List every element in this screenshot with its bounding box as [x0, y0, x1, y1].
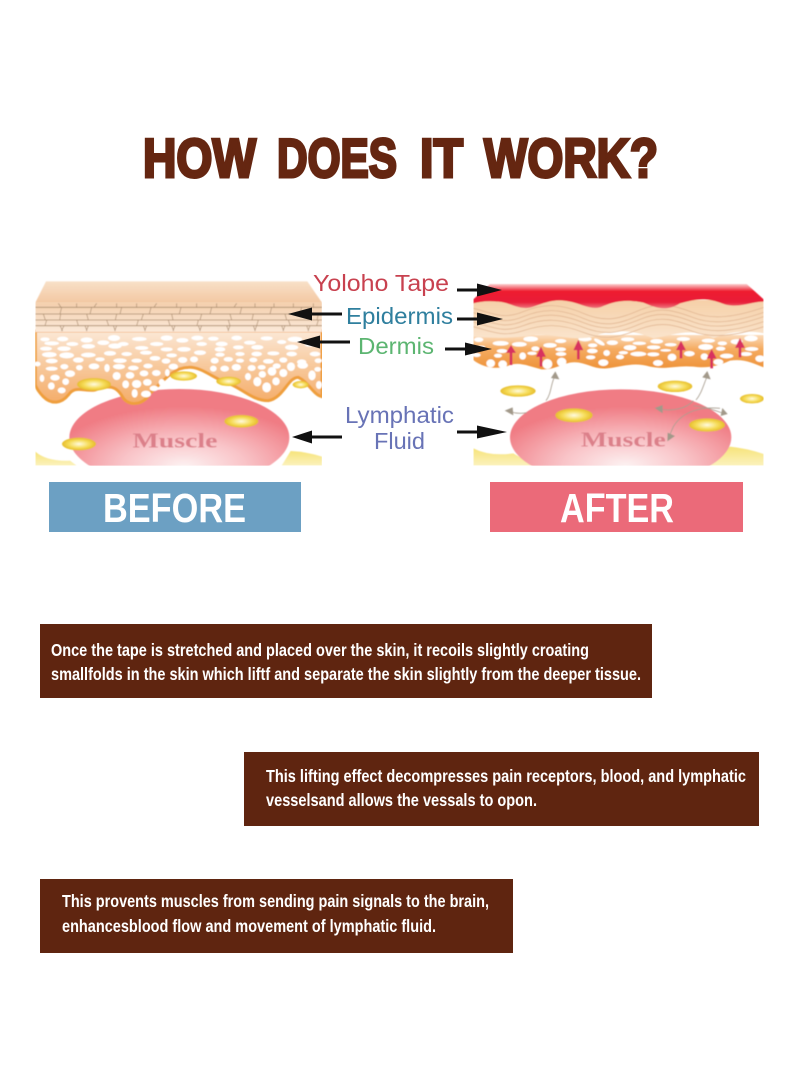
- text box 1: smallfolds in the skin which liftf and separate the skin slightly from the deeper tissue.: [51, 664, 641, 684]
- epidermis before: [35, 303, 322, 332]
- label: Epidermis: Epidermis: [346, 303, 453, 329]
- muscle before: Muscle: [132, 431, 217, 453]
- title: [143, 127, 658, 189]
- muscle after: [509, 388, 732, 466]
- centre labels: [313, 270, 454, 454]
- top surface before: [35, 281, 322, 303]
- epidermis after: [473, 300, 764, 338]
- badge: before: [49, 482, 301, 532]
- panel: before skin diagram: [35, 281, 322, 466]
- title: DOES: [277, 127, 397, 189]
- text box 2: vesselsand allows the vessals to opon.: [266, 790, 537, 810]
- pink up arrows: [506, 338, 745, 368]
- label: Dermis: Dermis: [358, 333, 434, 359]
- label: Lymphatic Fluid: [345, 402, 454, 454]
- badge: after: AFTER: [560, 485, 674, 531]
- text box 3: enhancesblood flow and movement of lymphatic fluid.: [62, 916, 436, 936]
- title: WORK?: [484, 127, 658, 189]
- badge: before: BEFORE: [103, 485, 246, 531]
- text box 3: [40, 879, 513, 953]
- label: Lymphatic Fluid: Fluid: [374, 428, 425, 454]
- muscle after: Muscle: [581, 430, 666, 452]
- panel: after skin diagram: [473, 284, 765, 485]
- text box 1: Once the tape is stretched and placed over the skin, it recoils slightly croating: [51, 640, 589, 660]
- grey flow arrows: [505, 371, 728, 441]
- yellow base fat after: [473, 447, 764, 466]
- label: Yoloho Tape: Yoloho Tape: [313, 270, 449, 296]
- text box 2: [244, 752, 759, 826]
- muscle before: [68, 388, 290, 466]
- pointer arrows: [288, 284, 507, 444]
- yellow base fat before: [35, 451, 322, 466]
- dermis before: [34, 331, 322, 404]
- text box 3: This provents muscles from sending pain signals to the brain,: [62, 891, 489, 911]
- dermis after: [473, 335, 765, 369]
- badge: after: [490, 482, 743, 532]
- lymph capsules after: [500, 381, 764, 432]
- lymph capsules before: [62, 371, 309, 450]
- label: Lymphatic Fluid: Lymphatic: [345, 402, 454, 428]
- text box 1: [40, 624, 652, 698]
- title: IT: [420, 127, 463, 189]
- title: HOW: [143, 127, 256, 189]
- tape: red top layer: [473, 284, 764, 308]
